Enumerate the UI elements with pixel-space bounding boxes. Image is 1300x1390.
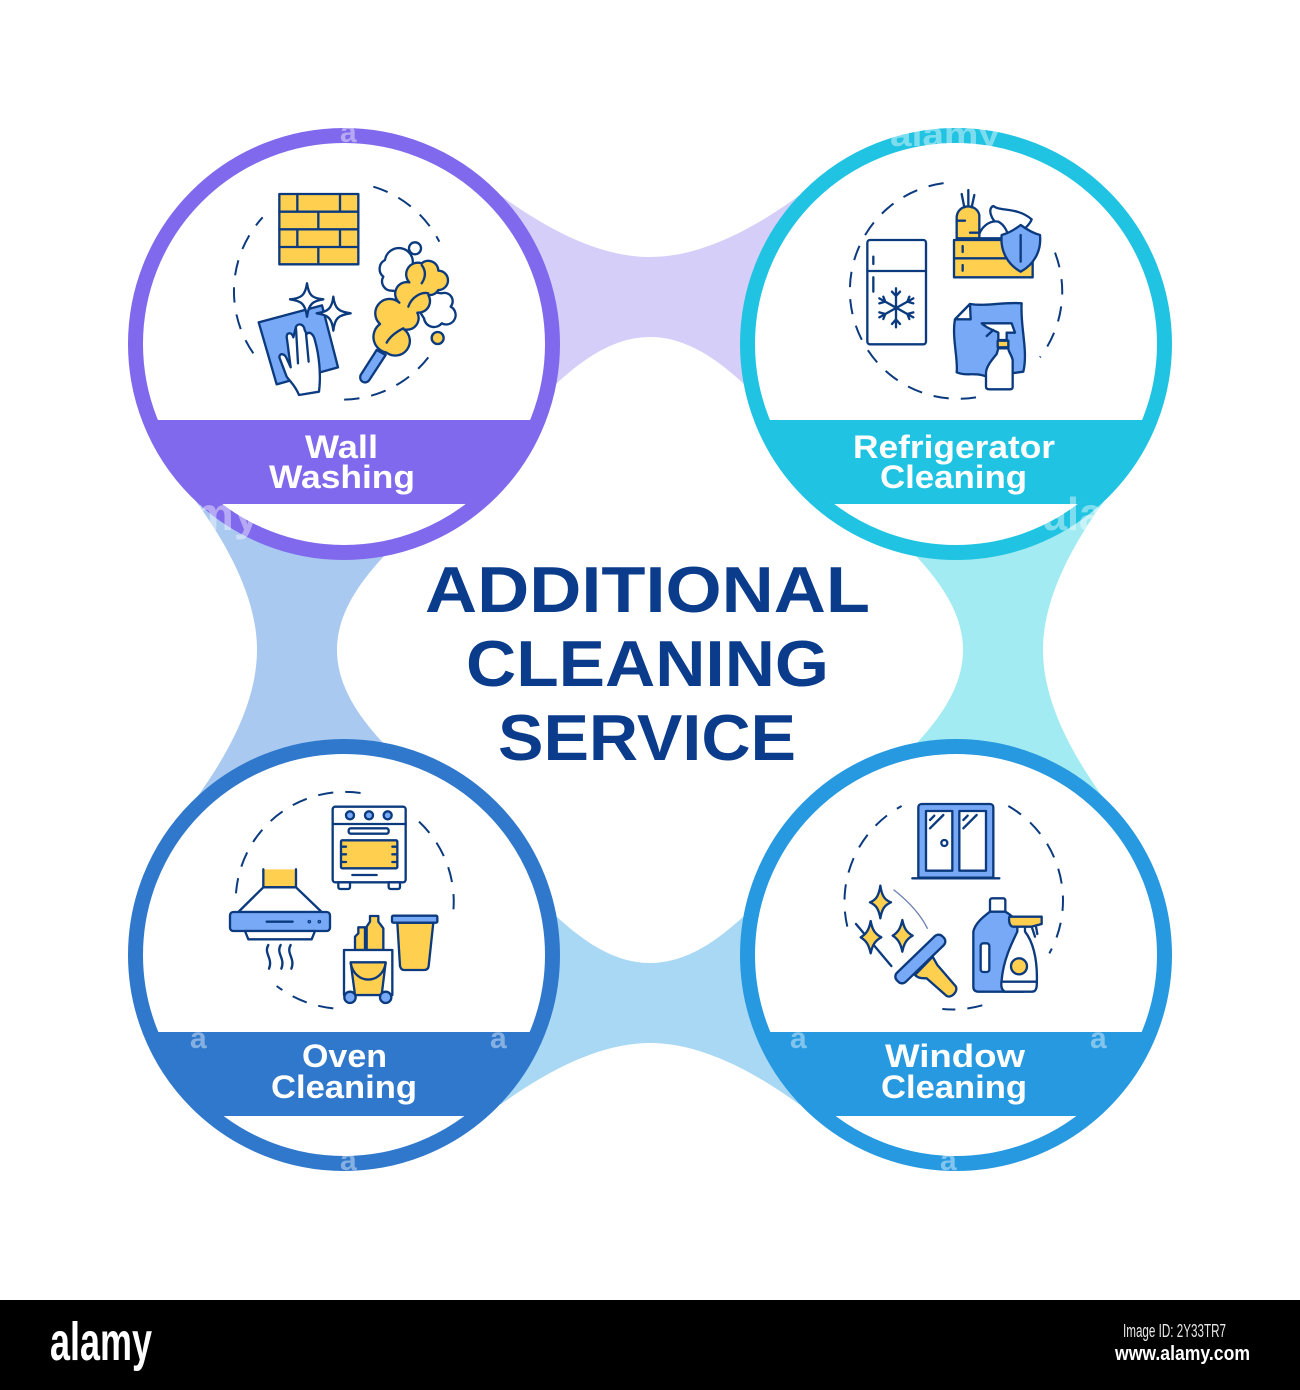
watermark fragments: ala: [1043, 488, 1103, 540]
title: CLEANING: [466, 627, 829, 700]
connector: top purple: [500, 195, 800, 385]
icon: oven cleaning: [230, 792, 454, 1008]
watermark fragments: a: [190, 1022, 207, 1055]
panel: wall washing: [136, 136, 552, 552]
watermark fragments: a: [1090, 1022, 1107, 1055]
watermark fragments: a: [940, 1144, 957, 1177]
footer image id: Image ID: 2Y33TR7: [1123, 1321, 1226, 1341]
watermark fragments: alamy: [890, 116, 1000, 154]
label: window cleaning: Window: [885, 1038, 1025, 1074]
label: refrigerator cleaning: [853, 429, 1055, 495]
label: oven cleaning: [271, 1038, 417, 1105]
label: oven cleaning: Cleaning: [271, 1069, 417, 1105]
title: [425, 553, 870, 774]
label: refrigerator cleaning: Cleaning: [880, 459, 1027, 495]
label: wall washing: Wall: [305, 429, 378, 465]
panel: oven cleaning: [136, 746, 552, 1164]
watermark fragments: my: [192, 488, 260, 540]
icon: window cleaning: [844, 804, 1063, 1009]
title: SERVICE: [498, 701, 796, 774]
connector: left blue: [195, 500, 385, 800]
icon: refrigerator cleaning: [850, 182, 1062, 399]
icon: wall washing: [234, 187, 456, 400]
watermark fragments: a: [490, 1022, 507, 1055]
label: oven cleaning: Oven: [302, 1038, 387, 1074]
footer bar: [0, 1300, 1300, 1390]
footer url: www.alamy.com: [1114, 1343, 1250, 1365]
footer logo: alamy: [50, 1312, 152, 1372]
connector: bottom sky: [500, 915, 800, 1105]
panel: refrigerator cleaning: [748, 136, 1164, 552]
connector: right teal: [915, 500, 1105, 800]
watermark fragments: a: [340, 1144, 357, 1177]
label: wall washing: Washing: [269, 459, 415, 495]
watermark fragments: [190, 116, 1107, 1177]
watermark fragments: a: [340, 116, 357, 149]
label: wall washing: [269, 429, 415, 495]
watermark fragments: a: [790, 1022, 807, 1055]
label: window cleaning: Cleaning: [881, 1069, 1027, 1105]
label: refrigerator cleaning: Refrigerator: [853, 429, 1055, 465]
title: ADDITIONAL: [425, 553, 870, 626]
panel: window cleaning: [748, 746, 1164, 1164]
label: window cleaning: [881, 1038, 1027, 1105]
